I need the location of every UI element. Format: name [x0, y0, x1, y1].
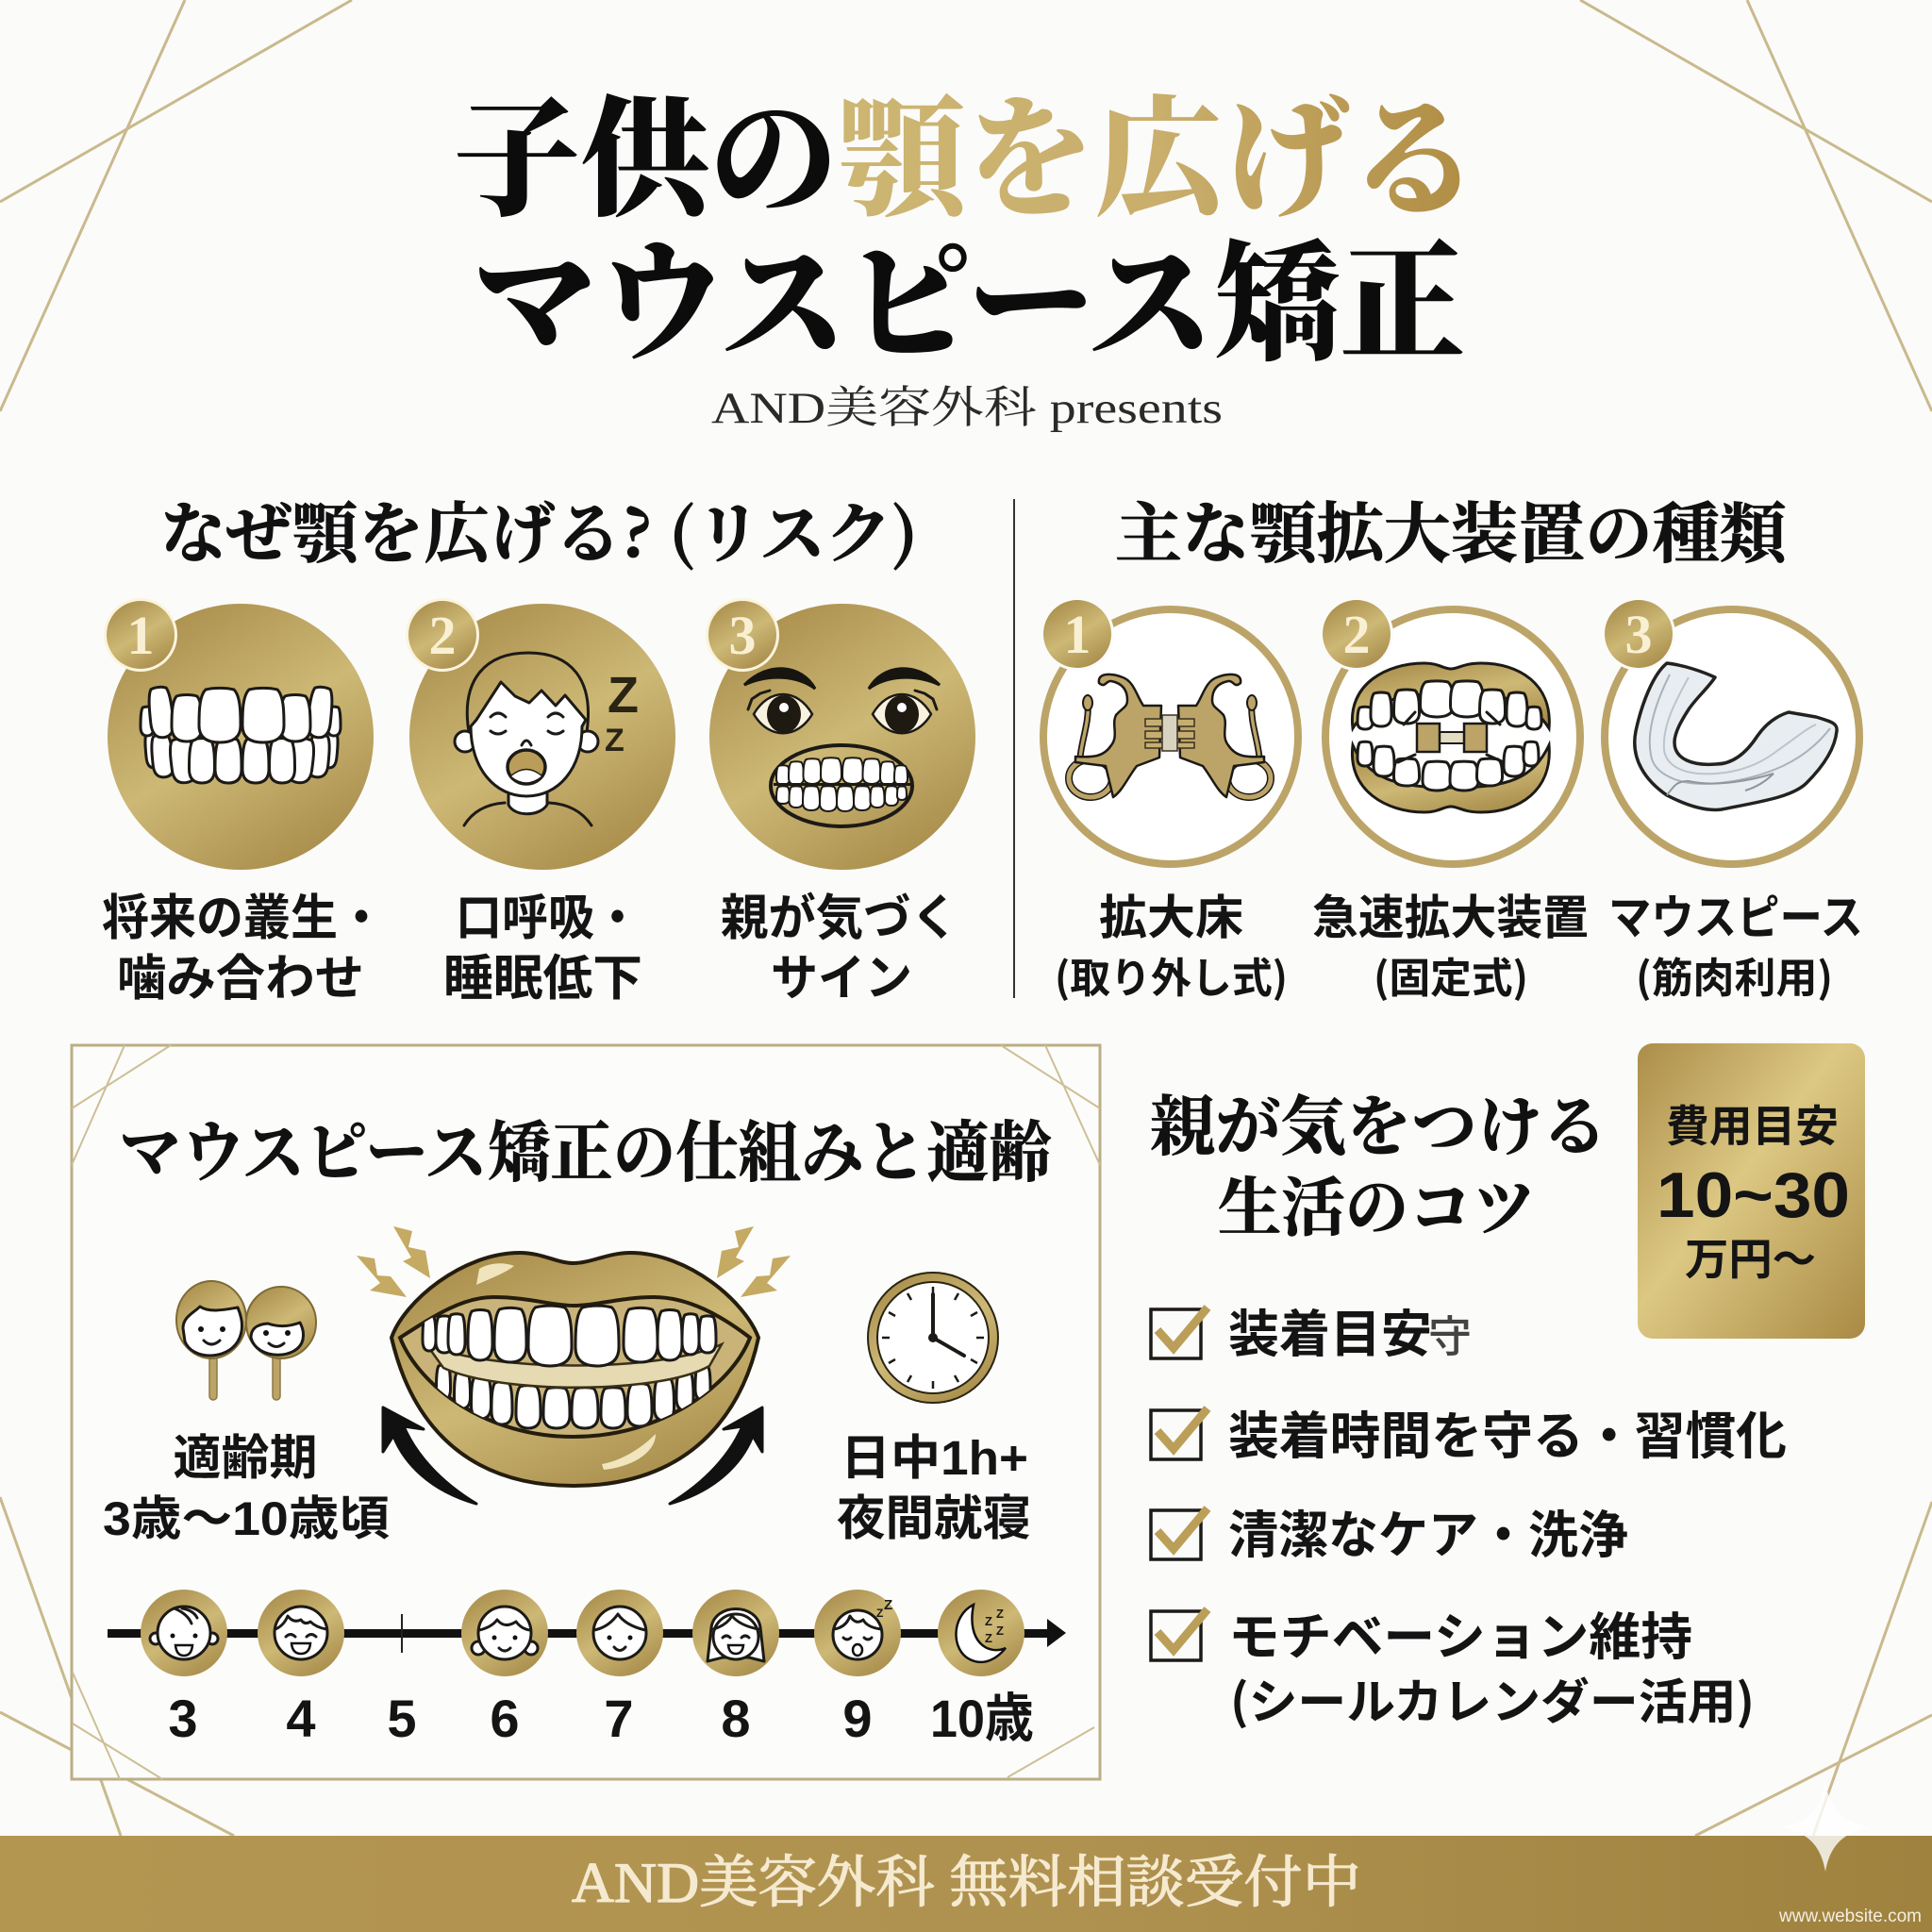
badge 1: 1 [126, 605, 155, 666]
timeline icon age 8 [692, 1590, 779, 1676]
cost box: 10~30 [1657, 1159, 1850, 1231]
footer bar: AND美容外科 無料相談受付中 [572, 1852, 1361, 1914]
appliance labels: (筋肉利用) [1636, 944, 1833, 1005]
panel: appliance 1 expansion plate [1041, 597, 1298, 864]
check item 4: モチベーション維持 [1228, 1595, 1692, 1670]
icon: sleeping child: Z [605, 723, 625, 758]
risk labels: 睡眠低下 [443, 939, 642, 1009]
icon: clock [868, 1273, 998, 1403]
badge 1: 1 [1064, 604, 1091, 665]
section heading: appliance types: 主な顎拡大装置の種類 [1115, 481, 1790, 576]
timeline icon age 10 moon: Z [996, 1624, 1004, 1638]
footer bar [0, 1836, 1932, 1932]
badge 3 [1602, 597, 1675, 671]
timeline age numbers: 9 [842, 1689, 873, 1748]
badge 2: 2 [428, 605, 457, 666]
panel: risk 2 mouth breathing [406, 598, 675, 870]
text: wear time [837, 1431, 1031, 1549]
title [453, 56, 1479, 387]
appliance labels: (固定式) [1374, 944, 1528, 1005]
title: マウスピース矯正 [472, 200, 1466, 387]
appliance labels: 急速拡大装置 [1312, 880, 1589, 948]
timeline icon age 7 [576, 1590, 663, 1676]
badge 1 [1041, 597, 1114, 671]
timeline icon age 10 moon: Z [996, 1607, 1004, 1621]
timeline icon age 6 [461, 1590, 548, 1676]
heading: lifestyle tips: 生活のコツ [1218, 1158, 1536, 1249]
cost box: 費用目安 [1666, 1092, 1839, 1155]
panel: risk 1 crowding [104, 598, 374, 870]
checklist [1151, 1292, 1787, 1733]
check item 1: 装着目安守 [1228, 1292, 1472, 1367]
timeline icon age 9: Z [876, 1607, 883, 1620]
badge 1 [104, 598, 177, 672]
badge 3: 3 [728, 605, 757, 666]
heading: lifestyle tips [1150, 1074, 1607, 1249]
timeline icon age 9 [814, 1590, 901, 1676]
timeline icon age 9: Z [884, 1597, 892, 1613]
check item 4: (シールカレンダー活用) [1230, 1663, 1755, 1733]
timeline icon age 10 moon [938, 1590, 1024, 1676]
title: 子供の顎を広げる [453, 56, 1479, 242]
badge 3: 3 [1624, 604, 1653, 665]
arrow: left expansion arrow [383, 1407, 476, 1504]
risk labels: 親が気づく [721, 878, 958, 949]
panel heading: マウスピース矯正の仕組みと適齢 [119, 1100, 1052, 1195]
panel: appliance 2 rapid expander [1320, 597, 1580, 864]
icon: children lollipop faces [176, 1281, 316, 1400]
divider line [1013, 499, 1015, 998]
check item 3: 清潔なケア・洗浄 [1228, 1493, 1628, 1568]
cost box: 万円〜 [1685, 1225, 1816, 1288]
text: wear time: 日中1h+ [841, 1431, 1028, 1485]
timeline age numbers: 5 [387, 1689, 417, 1748]
text: suitable age: 3歳〜10歳頃 [103, 1492, 390, 1545]
timeline age numbers: 10歳 [930, 1689, 1034, 1748]
risk labels: 将来の叢生・ [102, 878, 385, 949]
icon: gold pressure arrows [357, 1226, 791, 1297]
timeline age numbers: 7 [604, 1689, 634, 1748]
icon: sleeping child: Z [608, 667, 639, 724]
timeline age numbers: 3 [168, 1689, 198, 1748]
icon: clear mouthpiece [1635, 663, 1837, 809]
check item 4 [1151, 1595, 1755, 1733]
panel: risk 3 signs [706, 598, 975, 870]
badge 3 [706, 598, 779, 672]
panel: mechanism and suitable age [0, 1043, 1932, 1932]
appliance labels: 拡大床 [1099, 880, 1243, 948]
timeline icon age 3 [141, 1590, 227, 1676]
timeline icon age 4 [258, 1590, 344, 1676]
heading: lifestyle tips: 親が気をつける [1150, 1074, 1607, 1168]
appliance labels: マウスピース [1608, 880, 1863, 948]
risk labels [102, 878, 958, 1009]
icon: crowded teeth [141, 686, 341, 784]
risk labels: 噛み合わせ [117, 939, 364, 1009]
icon: lips and teeth with mouthpiece [391, 1253, 758, 1486]
timeline icon age 10 moon: Z [985, 1614, 992, 1628]
age timeline [108, 1590, 1066, 1748]
badge 2: 2 [1343, 604, 1370, 665]
website watermark: www.website.com [1778, 1907, 1922, 1926]
icon: sparkle watermark [1781, 1782, 1871, 1872]
icon: removable expansion plate [1069, 675, 1271, 797]
text: wear time: 夜間就寝 [837, 1479, 1031, 1549]
risk labels: 口呼吸・ [456, 878, 641, 949]
timeline age numbers [168, 1689, 1034, 1748]
appliance labels [1055, 880, 1863, 1005]
arrow: right expansion arrow [670, 1407, 762, 1504]
text: suitable age: 適齢期 [173, 1431, 318, 1485]
text: suitable age [103, 1431, 390, 1545]
icon: sleeping child [455, 653, 639, 825]
subtitle: AND美容外科 presents [711, 384, 1223, 433]
timeline age numbers: 6 [490, 1689, 520, 1748]
badge 2 [406, 598, 479, 672]
timeline age numbers: 8 [721, 1689, 751, 1748]
check item 2: 装着時間を守る・習慣化 [1228, 1394, 1787, 1469]
icon: rapid palatal expander [1352, 663, 1549, 812]
section heading: risks: なぜ顎を広げる? (リスク) [160, 481, 918, 576]
icon: face with crowded mouth [744, 669, 940, 826]
panel: appliance 3 mouthpiece [1602, 597, 1859, 864]
timeline age numbers: 4 [286, 1689, 316, 1748]
appliance labels: (取り外し式) [1055, 944, 1288, 1005]
risk labels: サイン [771, 939, 912, 1009]
cost box [1638, 1043, 1865, 1339]
badge 2 [1320, 597, 1393, 671]
timeline icon age 10 moon: Z [985, 1631, 992, 1645]
